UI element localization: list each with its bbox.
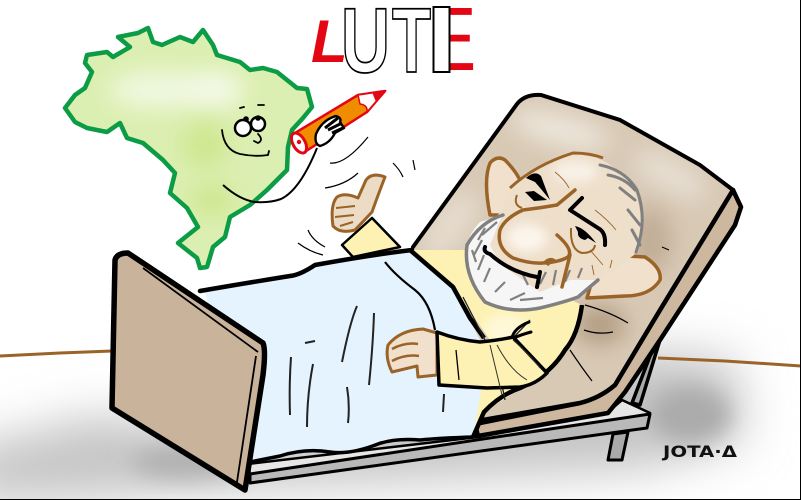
head of the man (465, 153, 642, 310)
skull outline brown (510, 153, 603, 188)
map of Brazil (65, 28, 317, 268)
signature: JOTA·Δ (662, 442, 738, 461)
horizon line right (658, 358, 801, 366)
map arm (223, 148, 317, 202)
finger lines (392, 344, 419, 361)
nose (507, 224, 547, 252)
thumbs up hand (332, 175, 400, 257)
cheek line (562, 255, 570, 287)
floor shadow (0, 350, 745, 500)
eye bags (516, 195, 595, 253)
bed rear leg (632, 340, 660, 405)
mouth (485, 247, 540, 287)
grey hair (600, 165, 642, 252)
pencil (288, 91, 385, 156)
left eye and eyebrow (526, 173, 550, 200)
right eye and eyebrow (570, 198, 605, 245)
blanket (200, 250, 486, 462)
motion lines (298, 137, 415, 255)
hand on blanket (387, 329, 437, 377)
footboard (112, 253, 264, 490)
horizon line left (0, 351, 112, 356)
nose outline (499, 190, 575, 263)
beard (465, 215, 598, 310)
fingers (325, 118, 343, 133)
shirt (410, 250, 582, 437)
map face (222, 105, 269, 156)
mattress backrest (412, 95, 741, 436)
bed front leg (608, 432, 628, 460)
title LUTE: L (311, 8, 348, 75)
left ear of the man (486, 158, 520, 215)
shirt sleeve (437, 332, 547, 395)
right ear of the man (587, 255, 660, 298)
map hand holding pencil (316, 116, 344, 146)
bed base (248, 400, 650, 483)
